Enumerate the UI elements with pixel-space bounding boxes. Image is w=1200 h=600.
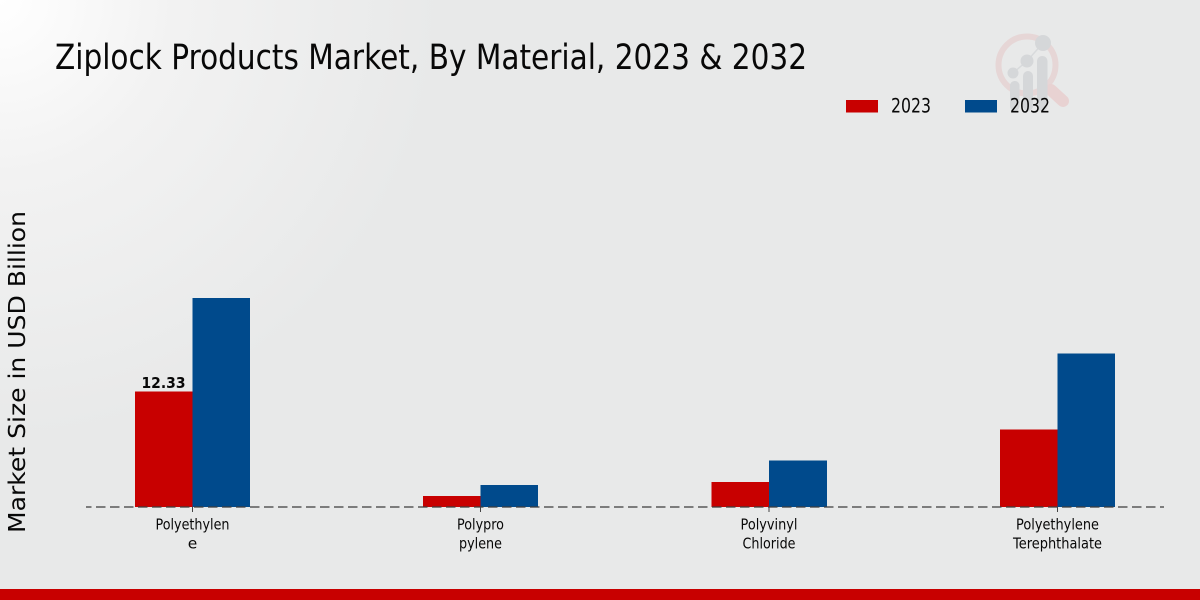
x axis baseline [86, 506, 1164, 508]
x label: Polyethylene [156, 516, 230, 552]
bar chart [86, 298, 1164, 512]
title: Ziplock Products Market, By Material, 2023 & 2032 [55, 38, 807, 78]
x label: Polyethylene Terephthalate: Polyethylene [1016, 516, 1099, 534]
legend: 2023 [846, 94, 931, 118]
legend: 2023: 2023 [891, 94, 931, 118]
x label: Polypropylene [457, 516, 504, 552]
x label: Polyethylene Terephthalate: Terephthalate [1012, 534, 1102, 552]
x label: Polypropylene: pylene [459, 534, 502, 552]
x label: Polyethylene Terephthalate [1012, 516, 1102, 552]
x label: Polyethylene: Polyethylen [156, 516, 230, 534]
x label: Polyethylene: e [188, 534, 197, 552]
x label: Polyvinyl Chloride [740, 516, 798, 552]
bars: Polyethylene Terephthalate [1000, 354, 1115, 507]
icon: watermark logo [998, 35, 1063, 111]
x label: Polyvinyl Chloride: Polyvinyl [740, 516, 798, 534]
y-axis title: Market Size in USD Billion [5, 211, 31, 533]
value label: 12.33: 12.33 [142, 374, 186, 392]
bars: Polyethylene [135, 298, 250, 507]
legend: 2032: 2032 [1010, 94, 1050, 118]
x label: Polyvinyl Chloride: Chloride [742, 534, 796, 552]
legend: 2032 [965, 94, 1050, 118]
bars: Polypropylene [423, 485, 538, 507]
legend [846, 94, 1050, 118]
x label: Polypropylene: Polypro [457, 516, 504, 534]
bars: Polyvinyl Chloride [712, 460, 827, 507]
footer bar [0, 589, 1200, 600]
